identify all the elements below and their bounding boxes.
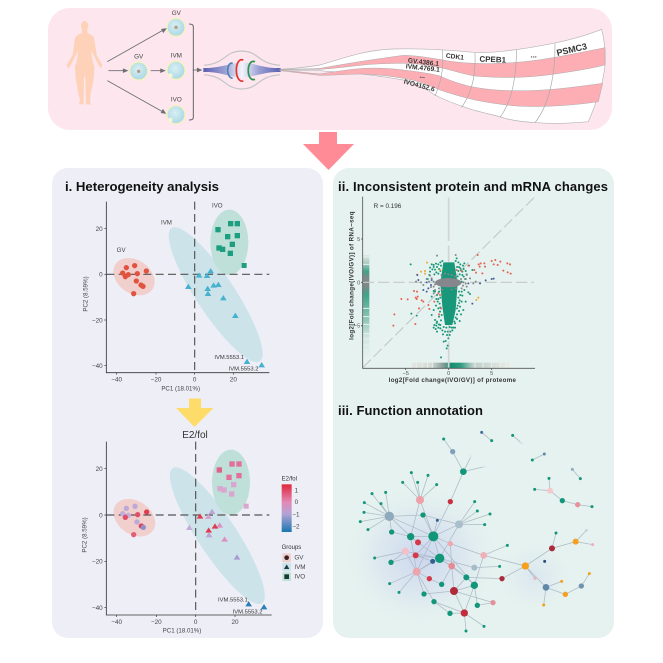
workflow left: oocyte collection and mass spectrometer bbox=[67, 10, 281, 124]
oocyte labels: GV bbox=[172, 10, 182, 17]
icon: GV oocyte top bbox=[167, 18, 185, 36]
scatter points: orange bbox=[417, 263, 478, 300]
confidence ellipses bbox=[106, 450, 278, 614]
tick labels: −40 bbox=[92, 363, 103, 370]
outlier labels: IVM.5553.2 bbox=[233, 609, 262, 615]
axis titles: PC1 (18.01%) bbox=[161, 386, 200, 393]
tick labels: −20 bbox=[151, 377, 162, 384]
confidence ellipses bbox=[106, 210, 276, 372]
axis titles: PC2 (8.59%) bbox=[83, 276, 90, 312]
legend: groups bbox=[282, 545, 306, 581]
tick labels bbox=[92, 466, 239, 626]
icon: IVO oocyte bbox=[167, 106, 185, 124]
column labels: PSMC3 bbox=[556, 41, 588, 58]
data matrix ribbon bbox=[280, 29, 605, 123]
tick labels: 20 bbox=[96, 226, 103, 233]
outlier labels: IVM.5553.1 bbox=[218, 598, 248, 604]
row labels: GV.4386.1 bbox=[407, 57, 440, 68]
icon: mass spectrometer bbox=[203, 51, 281, 89]
IVM points bbox=[186, 509, 267, 609]
row labels: ... bbox=[419, 73, 425, 80]
marginal rug left bbox=[363, 255, 369, 358]
axes and reference lines bbox=[104, 202, 269, 375]
oocyte labels: IVO bbox=[171, 96, 182, 103]
tick labels: −20 bbox=[151, 619, 162, 626]
legend: groups: IVO bbox=[294, 574, 305, 581]
network edges bbox=[360, 432, 593, 631]
reference lines bbox=[363, 198, 534, 368]
icon: human figure bbox=[67, 21, 102, 104]
scatter cloud: green bbox=[411, 258, 472, 357]
panel: sample workflow bbox=[48, 8, 612, 130]
tick labels: 0 bbox=[193, 377, 197, 384]
column labels: ... bbox=[531, 50, 537, 59]
arrow: down to analyses bbox=[303, 132, 354, 170]
tick labels: −40 bbox=[111, 619, 123, 626]
axes bbox=[361, 197, 535, 370]
axes and reference lines bbox=[104, 442, 272, 617]
panel: protein and mRNA changes, function annotation bbox=[333, 168, 614, 638]
PCA chart: groups bbox=[83, 202, 276, 393]
panel background bbox=[333, 168, 614, 638]
group labels: GV bbox=[117, 247, 126, 254]
group labels bbox=[117, 202, 258, 373]
row labels: IVO4152.6 bbox=[403, 79, 436, 94]
group labels: IVM bbox=[161, 219, 172, 226]
legend: groups: Groups bbox=[282, 545, 301, 551]
legend: groups: GV bbox=[294, 555, 304, 562]
axis titles: log2[Fold change(IVO/GV)] of RNA−seq bbox=[348, 211, 355, 340]
row labels: IVM.4769.1 bbox=[405, 63, 440, 74]
network graph bbox=[342, 431, 594, 632]
tick labels: 0 bbox=[99, 272, 103, 279]
panel background bbox=[52, 168, 323, 638]
tick labels: −20 bbox=[92, 317, 103, 324]
GV points bbox=[120, 504, 149, 537]
tick labels: 0 bbox=[99, 512, 103, 519]
network background glow bbox=[342, 483, 575, 630]
heading: i. Heterogeneity analysis bbox=[65, 179, 219, 194]
tick labels bbox=[354, 237, 493, 377]
oocyte labels: IVM bbox=[171, 52, 182, 59]
label: E2/fol: E2/fol bbox=[182, 430, 208, 441]
IVO points bbox=[217, 461, 249, 509]
network nodes: small leaves bbox=[359, 431, 594, 632]
icon: GV oocyte middle bbox=[130, 62, 148, 80]
axis titles bbox=[82, 517, 201, 635]
column dividers bbox=[435, 43, 555, 123]
column labels bbox=[445, 41, 588, 65]
bracket bbox=[189, 24, 193, 120]
column labels: CDK1 bbox=[445, 53, 465, 62]
tick labels: −5 bbox=[402, 371, 409, 377]
tick labels: −40 bbox=[111, 377, 123, 384]
legend: groups: IVM bbox=[294, 564, 306, 571]
scatter chart bbox=[348, 197, 535, 384]
column labels: CPEB1 bbox=[479, 55, 507, 65]
group labels: IVO bbox=[212, 202, 223, 209]
axis titles bbox=[348, 211, 517, 384]
legend: E2/fol colour bar: 1 bbox=[295, 487, 299, 494]
tick labels: 5 bbox=[490, 371, 493, 377]
tick labels bbox=[92, 226, 237, 384]
row labels bbox=[403, 57, 440, 94]
tick labels: 5 bbox=[357, 237, 360, 243]
ribbon body bbox=[280, 29, 605, 123]
scatter points: navy bbox=[417, 275, 494, 304]
axis titles: log2[Fold change(IVO/GV)] of proteome bbox=[389, 377, 517, 384]
legend: E2/fol colour bar: −1 bbox=[292, 511, 300, 518]
network nodes: large hubs bbox=[385, 449, 584, 617]
tick labels: 0 bbox=[447, 371, 450, 377]
legend: E2/fol colour bar: E2/fol bbox=[282, 476, 297, 482]
scatter points: red bbox=[393, 255, 511, 326]
arrows: collection paths bbox=[107, 29, 201, 113]
tick labels: −40 bbox=[92, 605, 103, 612]
axis titles: PC2 (8.59%) bbox=[82, 517, 89, 553]
outlier labels bbox=[218, 598, 262, 615]
axis titles bbox=[83, 276, 200, 393]
pink band lower bbox=[280, 68, 603, 106]
tick labels: 0 bbox=[194, 619, 198, 626]
IVO points bbox=[215, 221, 247, 268]
legend: E2/fol colour bar: −2 bbox=[292, 523, 300, 530]
legend: E2/fol colour bar bbox=[282, 476, 300, 532]
icon: IVM oocyte bbox=[167, 61, 185, 79]
workflow background bbox=[48, 8, 612, 130]
legend: E2/fol colour bar: 0 bbox=[295, 499, 299, 506]
tick labels: −20 bbox=[92, 559, 103, 566]
oocyte labels bbox=[134, 10, 182, 103]
axis titles: PC1 (18.01%) bbox=[163, 628, 201, 635]
scatter points: grey center bbox=[416, 255, 476, 293]
tick labels: −5 bbox=[354, 324, 360, 330]
heading ii: ii. Inconsistent protein and mRNA changes bbox=[338, 179, 608, 194]
tick labels: 20 bbox=[231, 619, 239, 626]
tick labels: 0 bbox=[357, 280, 360, 286]
group labels: IVM.5553.1 bbox=[214, 355, 244, 361]
panel: heterogeneity analysis bbox=[52, 168, 323, 638]
tick labels: 20 bbox=[230, 377, 237, 384]
heading iii: iii. Function annotation bbox=[338, 403, 483, 418]
correlation label: R = 0.196 bbox=[374, 203, 402, 210]
GV points bbox=[120, 263, 149, 296]
IVM points bbox=[185, 268, 265, 367]
PCA chart: E2/fol bbox=[82, 442, 306, 635]
arrow: yellow E2/fol bbox=[176, 398, 214, 427]
group labels: IVM.5553.2 bbox=[229, 367, 258, 373]
marginal rug bottom bbox=[412, 363, 510, 368]
tick labels: 20 bbox=[96, 466, 103, 473]
pink band upper bbox=[280, 48, 605, 77]
oocyte labels: GV bbox=[134, 53, 144, 60]
